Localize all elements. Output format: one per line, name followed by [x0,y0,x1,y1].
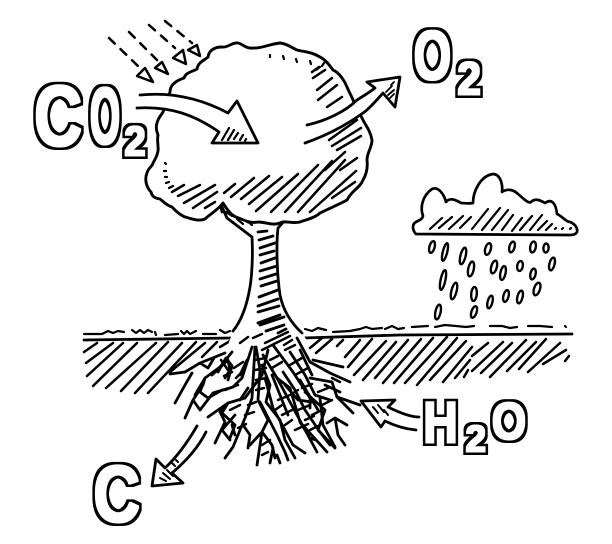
label: H2O: H [423,391,458,456]
soil surface line [84,334,572,340]
root hatching [221,332,340,455]
trunk hatching [258,231,286,333]
grass [84,325,566,335]
arrow hatching [386,82,394,98]
label: CO2: O [90,72,120,161]
label: C: C [93,449,140,539]
label: CO2 [34,68,146,165]
roots [170,332,360,465]
raindrops [428,241,556,320]
label: CO2: C [34,68,82,164]
branch stub [221,203,248,222]
tree [146,43,372,345]
label: H2O [423,391,526,460]
ground and soil [84,325,572,393]
arrow: CO2 into tree [137,94,258,143]
arrow hatching [373,405,388,415]
label: H2O: O [492,393,526,451]
label: O2 [414,17,481,105]
tree crown [146,43,372,224]
label: CO2: 2 [124,117,146,165]
label: H2O: 2 [466,418,486,460]
label: O2: O [414,17,451,95]
crown hatching [172,67,361,212]
cloud and rain [413,174,577,320]
cloud hatching [430,208,571,231]
soil hatching [84,337,569,393]
sun rays [109,21,192,68]
arrow: carbon to soil [152,426,206,486]
arrow hatching [160,460,178,481]
arrow hatching [222,128,246,141]
label: O2: 2 [457,54,481,105]
cloud [413,174,577,235]
arrow: water to roots [361,400,419,430]
arrow: O2 out of tree [305,77,400,143]
ray arrowheads [137,45,200,82]
trunk [221,203,310,345]
sunlight arrows [109,21,200,82]
